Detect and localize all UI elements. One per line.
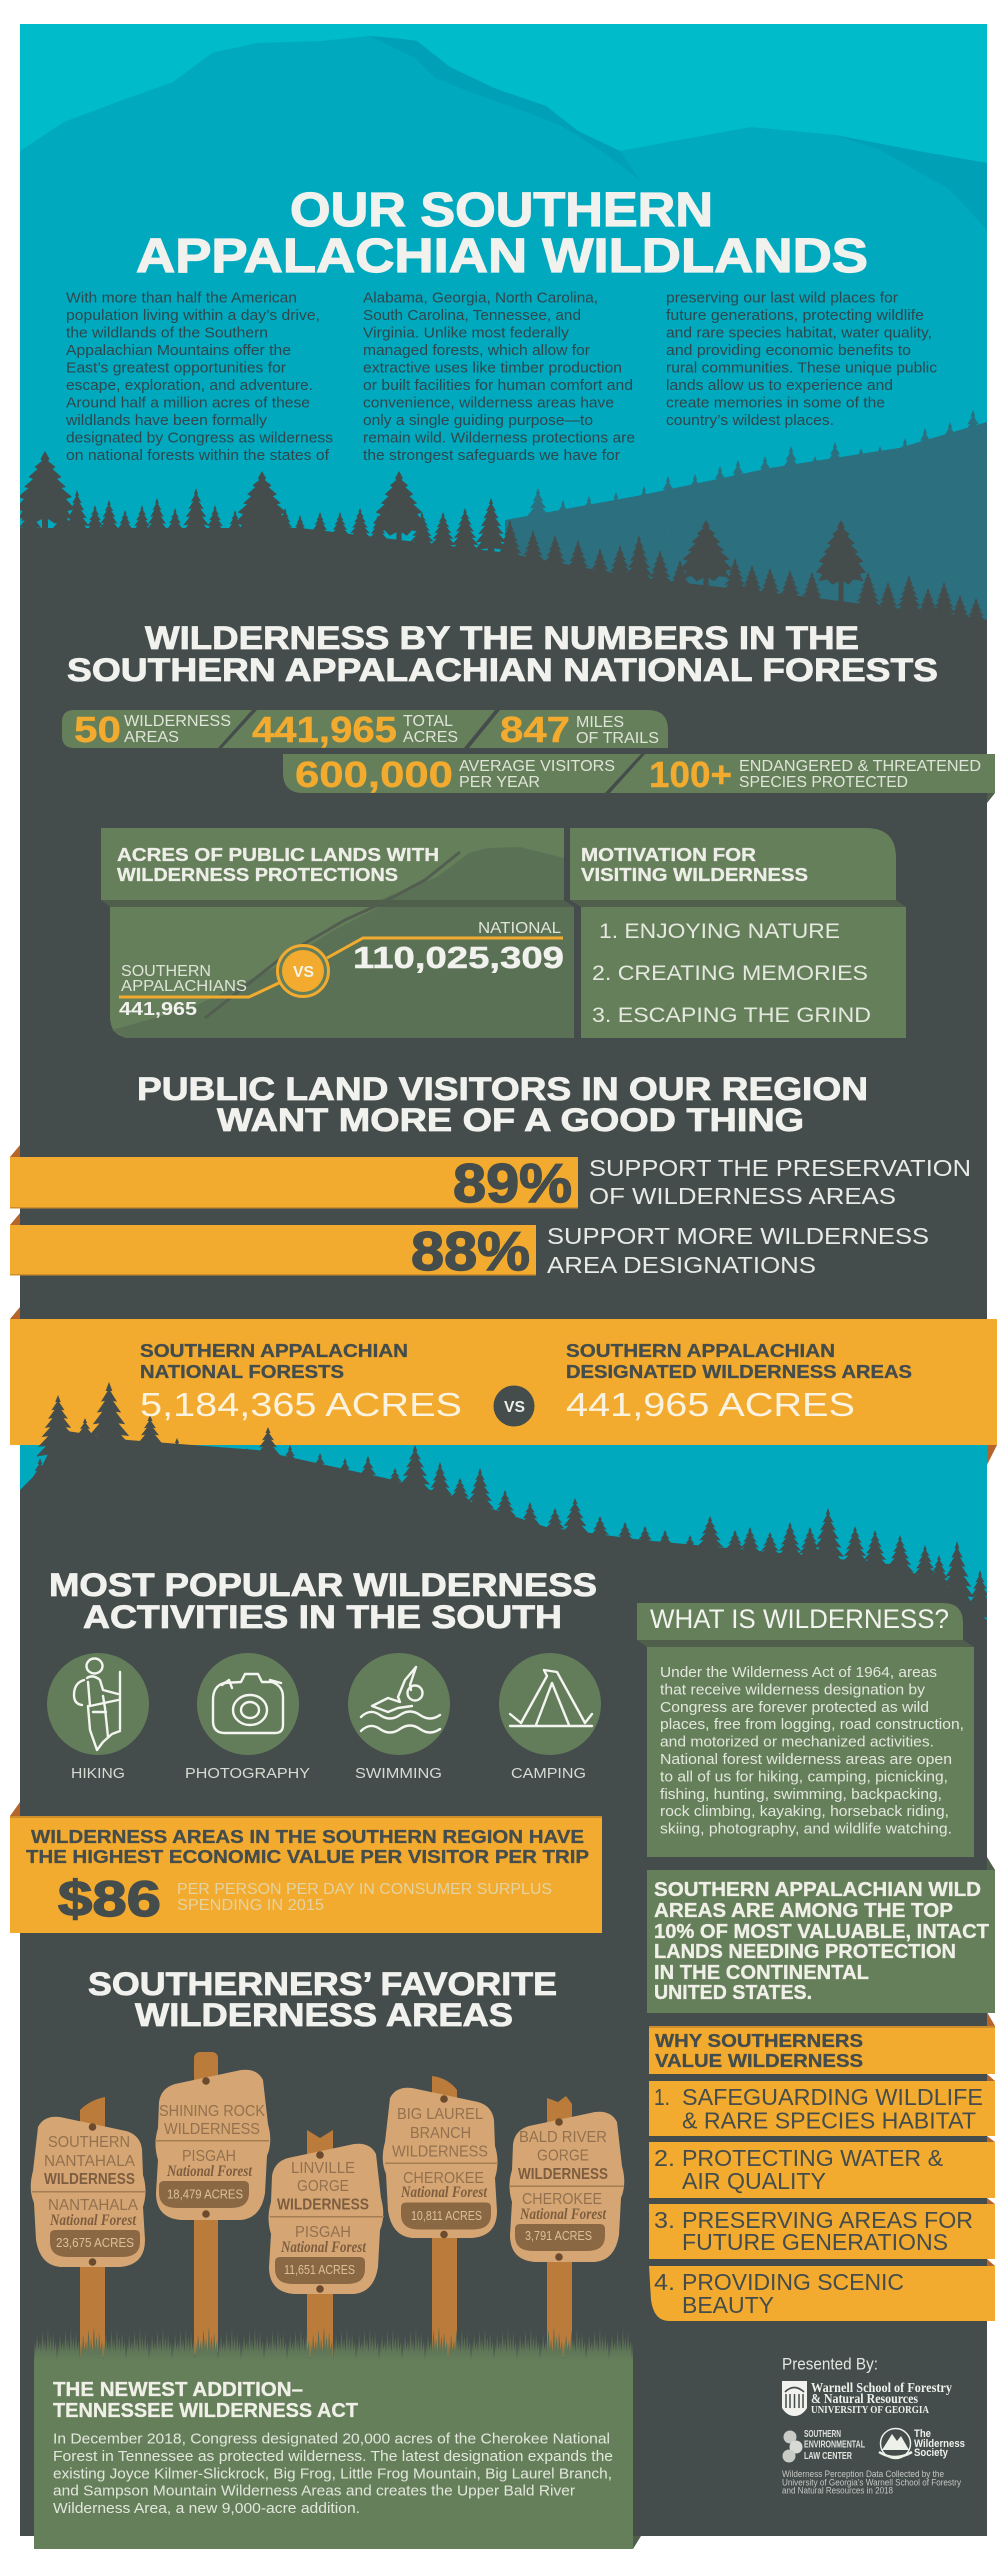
- panel: what is wilderness: fishing, hunting, swimming, backpacking,: [660, 1787, 942, 1803]
- panel: motivation for visiting wilderness: 3. ESCAPING THE GRIND: [592, 1004, 871, 1027]
- intro text column 2: remain wild. Wilderness protections are: [363, 430, 635, 446]
- stats row 2: ENDANGERED & THREATENED: [739, 758, 981, 775]
- panel: why southerners value wilderness: & RARE SPECIES HABITAT: [682, 2108, 976, 2134]
- intro text column 3: preserving our last wild places for: [666, 290, 898, 306]
- callout: economic value: WILDERNESS AREAS IN THE SOUTHERN REGION HAVE: [31, 1827, 584, 1847]
- sign: Big Laurel Branch Wilderness: BRANCH: [410, 2125, 471, 2142]
- sign: Bald River Gorge Wilderness: BALD RIVER: [519, 2129, 607, 2146]
- forest silhouette: lower forest: [20, 1382, 995, 1640]
- intro text column 3: lands allow us to experience and: [666, 378, 893, 394]
- band text: national forests vs wilderness acres: VS: [504, 1399, 525, 1416]
- icon: photography: [197, 1653, 299, 1755]
- heading: favorite wilderness areas: WILDERNESS AREAS: [135, 1997, 513, 2033]
- heading: most popular activities: MOST POPULAR WILDERNESS: [49, 1567, 597, 1603]
- panel: acres of public lands: NATIONAL: [478, 920, 561, 937]
- intro text column 2: or built facilities for human comfort and: [363, 378, 633, 394]
- callout: economic value: $86: [58, 1871, 161, 1927]
- credit note: University of Georgia’s Warnell School of Forestry: [782, 2478, 961, 2488]
- stats row 2: PER YEAR: [459, 774, 540, 791]
- intro text column 3: rural communities. These unique public: [666, 360, 937, 376]
- sign: Big Laurel Branch Wilderness: National Forest: [400, 2184, 488, 2201]
- heading: wilderness by the numbers: [67, 620, 938, 688]
- callout: top 10 percent: UNITED STATES.: [654, 1982, 812, 2004]
- intro text column 1: Around half a million acres of these: [66, 396, 310, 412]
- sign: Southern Nantahala Wilderness: 23,675 ACRES: [56, 2236, 134, 2250]
- hero background: sky and mountains: [20, 24, 987, 644]
- sign: Big Laurel Branch Wilderness: [383, 2076, 498, 2357]
- presented by: Presented By:: [782, 2354, 878, 2374]
- sign: Shining Rock Wilderness: WILDERNESS: [164, 2121, 260, 2138]
- heading: wilderness by the numbers: SOUTHERN APPALACHIAN NATIONAL FORESTS: [67, 652, 938, 688]
- panel: why southerners value wilderness: 2.: [654, 2145, 675, 2171]
- intro text column 1: designated by Congress as wilderness: [66, 430, 333, 446]
- logo: The Wilderness Society: The: [914, 2428, 931, 2440]
- panel: why southerners value wilderness: FUTURE GENERATIONS: [682, 2229, 948, 2255]
- panel: why southerners value wilderness: SAFEGUARDING WILDLIFE: [682, 2084, 983, 2110]
- sign: Big Laurel Branch Wilderness: 10,811 ACRES: [411, 2209, 482, 2223]
- callout: economic value: [10, 1802, 602, 1933]
- sign: Linville Gorge Wilderness: National Forest: [280, 2239, 367, 2256]
- sign: Southern Nantahala Wilderness: NANTAHALA: [44, 2153, 136, 2170]
- panel: what is wilderness: Under the Wilderness Act of 1964, areas: [660, 1665, 937, 1681]
- bar: 88 percent: 88%: [411, 1220, 530, 1282]
- icon: camping: [499, 1653, 601, 1755]
- band text: national forests vs wilderness acres: NATIONAL FORESTS: [140, 1362, 344, 1382]
- band text: national forests vs wilderness acres: 441,965 ACRES: [566, 1386, 855, 1423]
- callout: top 10 percent: AREAS ARE AMONG THE TOP: [654, 1900, 953, 1922]
- intro text column 1: [65, 290, 333, 464]
- stats row 1: ACRES: [403, 729, 458, 746]
- logo: The Wilderness Society: Society: [914, 2447, 949, 2459]
- logo: Southern Environmental Law Center: ENVIRONMENTAL: [804, 2440, 865, 2450]
- forest silhouette: far layer: [505, 410, 987, 620]
- activity labels: [71, 1765, 586, 1782]
- intro text column 1: With more than half the American: [66, 290, 297, 306]
- sign: Shining Rock Wilderness: National Forest: [166, 2163, 253, 2180]
- activity labels: PHOTOGRAPHY: [185, 1765, 310, 1782]
- sign: Big Laurel Branch Wilderness: BIG LAUREL: [397, 2106, 483, 2123]
- heading: favorite wilderness areas: [88, 1966, 557, 2033]
- panel: newest addition: In December 2018, Congress designated 20,000 acres of the Cherokee National: [53, 2432, 610, 2448]
- sign: Southern Nantahala Wilderness: NANTAHALA: [48, 2197, 139, 2214]
- sign: Linville Gorge Wilderness: WILDERNESS: [277, 2196, 369, 2214]
- heading: public land visitors: PUBLIC LAND VISITORS IN OUR REGION: [137, 1071, 868, 1107]
- sign: Shining Rock Wilderness: SHINING ROCK: [159, 2103, 266, 2120]
- panel: why southerners value wilderness: PRESERVING AREAS FOR: [682, 2207, 973, 2233]
- stats row 1: [62, 709, 668, 750]
- panel: newest addition: THE NEWEST ADDITION–: [53, 2379, 303, 2401]
- sign: Linville Gorge Wilderness: 11,651 ACRES: [284, 2263, 355, 2277]
- activity labels: CAMPING: [511, 1765, 586, 1782]
- callout: economic value: SPENDING IN 2015: [177, 1897, 324, 1914]
- bar: 88 percent: SUPPORT MORE WILDERNESS: [547, 1223, 929, 1249]
- panel: motivation for visiting wilderness: MOTIVATION FOR: [581, 845, 756, 865]
- panel: what is wilderness: to all of us for hiking, camping, picnicking,: [660, 1769, 948, 1785]
- bar: 88 percent: [10, 1213, 929, 1282]
- intro text column 2: only a single guiding purpose—to: [363, 413, 593, 429]
- panel: acres of public lands: VS: [293, 964, 314, 981]
- logo: Southern Environmental Law Center: [782, 2429, 865, 2462]
- title: [136, 184, 868, 283]
- band text: national forests vs wilderness acres: SOUTHERN APPALACHIAN: [566, 1341, 835, 1361]
- sign: Linville Gorge Wilderness: LINVILLE: [291, 2160, 355, 2177]
- panel: newest addition: Wilderness Area, a new 9,000-acre addition.: [53, 2501, 360, 2517]
- panel: what is wilderness: Congress are forever protected as wild: [660, 1700, 929, 1716]
- panel: why southerners value wilderness: WHY SOUTHERNERS: [655, 2031, 863, 2051]
- heading: public land visitors: [137, 1071, 868, 1138]
- heading: favorite wilderness areas: SOUTHERNERS’ FAVORITE: [88, 1966, 557, 2002]
- stats row 2: [283, 754, 995, 803]
- panel: why southerners value wilderness: 3.: [654, 2207, 675, 2233]
- panel: acres of public lands: 110,025,309: [353, 940, 564, 975]
- intro text column 3: [666, 290, 937, 429]
- panel: why southerners value wilderness: 1.: [654, 2084, 670, 2110]
- band text: national forests vs wilderness acres: SOUTHERN APPALACHIAN: [140, 1341, 408, 1361]
- sign: Bald River Gorge Wilderness: GORGE: [537, 2148, 589, 2164]
- band: national forests vs wilderness acres background: [10, 1307, 997, 1465]
- panel: motivation for visiting wilderness: 1. ENJOYING NATURE: [599, 920, 840, 943]
- bar: 89 percent: SUPPORT THE PRESERVATION: [589, 1155, 971, 1181]
- intro text column 1: on national forests within the states of: [66, 448, 330, 464]
- logo: Southern Environmental Law Center: LAW CENTER: [804, 2451, 853, 2462]
- panel: why southerners value wilderness: PROVIDING SCENIC: [682, 2269, 904, 2295]
- dark background panel: [20, 625, 987, 2536]
- bar: 89 percent: [10, 1145, 971, 1214]
- sign: Bald River Gorge Wilderness: [509, 2096, 624, 2357]
- band text: national forests vs wilderness acres: [140, 1341, 912, 1426]
- sign: Linville Gorge Wilderness: GORGE: [297, 2178, 349, 2195]
- panel: what is wilderness: places, free from logging, road construction,: [660, 1717, 964, 1733]
- callout: economic value: PER PERSON PER DAY IN CONSUMER SURPLUS: [177, 1881, 552, 1898]
- heading: most popular activities: [49, 1567, 597, 1635]
- stats row 2: AVERAGE VISITORS: [459, 758, 615, 775]
- callout: top 10 percent: IN THE CONTINENTAL: [654, 1962, 869, 1984]
- panel: motivation for visiting wilderness: [570, 828, 906, 1038]
- panel: what is wilderness: skiing, photography, and wildlife watching.: [660, 1822, 952, 1838]
- sign: Shining Rock Wilderness: [155, 2052, 270, 2357]
- title: APPALACHIAN WILDLANDS: [136, 230, 868, 283]
- intro text column 2: South Carolina, Tennessee, and: [363, 308, 581, 324]
- stats row 1: MILES: [576, 714, 624, 731]
- callout: top 10 percent: SOUTHERN APPALACHIAN WILD: [654, 1879, 981, 1901]
- panel: what is wilderness: WHAT IS WILDERNESS?: [650, 1604, 949, 1634]
- panel: why southerners value wilderness: [649, 2012, 995, 2321]
- logo: The Wilderness Society: Wilderness: [914, 2438, 965, 2450]
- bar: 88 percent: AREA DESIGNATIONS: [547, 1252, 816, 1278]
- intro text column 1: population living within a day’s drive,: [66, 308, 320, 324]
- intro text column 3: country’s wildest places.: [666, 413, 834, 429]
- credit note: [782, 2469, 961, 2496]
- callout: top 10 percent: [647, 1857, 995, 2013]
- sign: Bald River Gorge Wilderness: CHEROKEE: [522, 2191, 602, 2208]
- panel: newest addition: existing Joyce Kilmer-Slickrock, Big Frog, Little Frog Mountain, Big Laurel Branch,: [53, 2466, 612, 2482]
- panel: motivation for visiting wilderness: VISITING WILDERNESS: [581, 865, 808, 885]
- sign: Shining Rock Wilderness: PISGAH: [182, 2148, 236, 2165]
- intro text column 2: Virginia. Unlike most federally: [363, 326, 570, 342]
- intro text column 2: managed forests, which allow for: [363, 343, 590, 359]
- panel: newest addition: [34, 2359, 641, 2549]
- logo: The Wilderness Society: [879, 2428, 965, 2459]
- callout: top 10 percent: LANDS NEEDING PROTECTION: [654, 1941, 956, 1963]
- panel: acres of public lands: WILDERNESS PROTECTIONS: [117, 865, 398, 885]
- sign: Linville Gorge Wilderness: [268, 2130, 384, 2357]
- forest silhouette: near layer: [15, 451, 989, 644]
- sign: Southern Nantahala Wilderness: SOUTHERN: [48, 2134, 130, 2151]
- icon: swimming: [348, 1653, 450, 1755]
- title: OUR SOUTHERN: [290, 184, 713, 237]
- heading: most popular activities: ACTIVITIES IN THE SOUTH: [83, 1599, 562, 1635]
- panel: what is wilderness: rock climbing, kayaking, horseback riding,: [660, 1804, 949, 1820]
- stats row 1: 50: [74, 709, 121, 750]
- intro text column 3: and providing economic benefits to: [666, 343, 911, 359]
- intro text column 2: convenience, wilderness areas have: [363, 396, 614, 412]
- panel: acres of public lands: APPALACHIANS: [121, 978, 247, 995]
- panel: acres of public lands: [101, 828, 574, 1038]
- panel: acres of public lands: 441,965: [119, 999, 197, 1019]
- stats row 1: TOTAL: [403, 713, 453, 730]
- callout: top 10 percent: 10% OF MOST VALUABLE, INTACT: [654, 1921, 989, 1943]
- logo: Warnell School of Forestry: UNIVERSITY OF GEORGIA: [811, 2405, 930, 2416]
- intro text column 1: escape, exploration, and adventure.: [66, 378, 313, 394]
- stats row 1: OF TRAILS: [576, 730, 659, 747]
- intro text column 2: [363, 290, 635, 464]
- intro text column 3: and rare species habitat, water quality,: [666, 326, 932, 342]
- intro text column 1: East’s greatest opportunities for: [66, 360, 286, 376]
- bar: 89 percent: 89%: [453, 1152, 572, 1214]
- activity labels: HIKING: [71, 1765, 125, 1782]
- heading: wilderness by the numbers: WILDERNESS BY THE NUMBERS IN THE: [145, 620, 859, 656]
- sign: Big Laurel Branch Wilderness: WILDERNESS: [392, 2144, 488, 2160]
- panel: what is wilderness: and motorized or mechanized activities.: [660, 1735, 934, 1751]
- stats row 2: 100+: [649, 754, 732, 795]
- panel: why southerners value wilderness: AIR QUALITY: [682, 2168, 826, 2194]
- stats row 1: 441,965: [252, 709, 397, 750]
- icon: hiking: [47, 1653, 149, 1755]
- activity labels: SWIMMING: [355, 1765, 442, 1782]
- sign: Linville Gorge Wilderness: PISGAH: [295, 2224, 351, 2241]
- band text: national forests vs wilderness acres: DESIGNATED WILDERNESS AREAS: [566, 1362, 912, 1382]
- stats row 1: AREAS: [124, 729, 179, 746]
- panel: what is wilderness: National forest wilderness areas are open: [660, 1752, 952, 1768]
- panel: newest addition: TENNESSEE WILDERNESS ACT: [53, 2400, 358, 2422]
- sign: Southern Nantahala Wilderness: National Forest: [49, 2212, 137, 2229]
- panel: motivation for visiting wilderness: 2. CREATING MEMORIES: [592, 962, 868, 985]
- intro text column 2: Alabama, Georgia, North Carolina,: [363, 290, 598, 306]
- logo: Southern Environmental Law Center: SOUTHERN: [804, 2429, 841, 2440]
- credit note: Wilderness Perception Data Collected by the: [782, 2469, 944, 2479]
- stats row 1: 847: [500, 709, 570, 750]
- logo: Warnell School of Forestry: & Natural Resources: [811, 2391, 918, 2406]
- stats row 2: 600,000: [295, 754, 453, 795]
- intro text column 3: create memories in some of the: [666, 396, 885, 412]
- intro text column 1: wildlands have been formally: [65, 413, 268, 429]
- sign: Southern Nantahala Wilderness: WILDERNESS: [44, 2171, 135, 2188]
- panel: why southerners value wilderness: BEAUTY: [682, 2292, 774, 2318]
- panel: why southerners value wilderness: 4.: [654, 2269, 675, 2295]
- panel: why southerners value wilderness: VALUE WILDERNESS: [655, 2051, 863, 2071]
- panel: newest addition: and Sampson Mountain Wilderness Areas and creates the Upper Bald River: [53, 2484, 575, 2500]
- stats row 2: SPECIES PROTECTED: [739, 774, 908, 791]
- panel: why southerners value wilderness: PROTECTING WATER &: [682, 2145, 943, 2171]
- sign: Southern Nantahala Wilderness: [31, 2097, 146, 2357]
- logo: Warnell School of Forestry: [782, 2380, 952, 2416]
- intro text column 2: extractive uses like timber production: [363, 360, 622, 376]
- sign: Big Laurel Branch Wilderness: CHEROKEE: [403, 2170, 484, 2187]
- intro text column 3: future generations, protecting wildlife: [666, 308, 924, 324]
- panel: acres of public lands: SOUTHERN: [121, 963, 211, 980]
- panel: acres of public lands: ACRES OF PUBLIC LANDS WITH: [117, 845, 439, 865]
- intro text column 2: the strongest safeguards we have for: [363, 448, 620, 464]
- sign: Bald River Gorge Wilderness: WILDERNESS: [518, 2166, 608, 2183]
- sign: Shining Rock Wilderness: 18,479 ACRES: [167, 2188, 243, 2202]
- intro text column 1: the wildlands of the Southern: [66, 326, 268, 342]
- sign: Bald River Gorge Wilderness: 3,791 ACRES: [525, 2229, 592, 2243]
- callout: economic value: THE HIGHEST ECONOMIC VALUE PER VISITOR PER TRIP: [26, 1847, 589, 1867]
- credit note: and Natural Resources in 2018: [782, 2486, 893, 2496]
- grass: [34, 2326, 633, 2360]
- intro text column 1: Appalachian Mountains offer the: [66, 343, 291, 359]
- logo: Warnell School of Forestry: Warnell School of Forestry: [811, 2380, 952, 2395]
- panel: what is wilderness: that receive wilderness designation by: [660, 1682, 926, 1698]
- heading: public land visitors: WANT MORE OF A GOOD THING: [217, 1102, 804, 1138]
- band text: national forests vs wilderness acres: 5,184,365 ACRES: [140, 1386, 462, 1423]
- panel: what is wilderness: [637, 1603, 974, 1857]
- panel: newest addition: Forest in Tennessee as protected wilderness. The latest designation expands the: [53, 2449, 613, 2465]
- sign: Bald River Gorge Wilderness: National Forest: [519, 2206, 607, 2223]
- teal sky behind lower forest: [20, 1440, 987, 1630]
- stats row 1: WILDERNESS: [124, 713, 231, 730]
- bar: 89 percent: OF WILDERNESS AREAS: [589, 1183, 896, 1209]
